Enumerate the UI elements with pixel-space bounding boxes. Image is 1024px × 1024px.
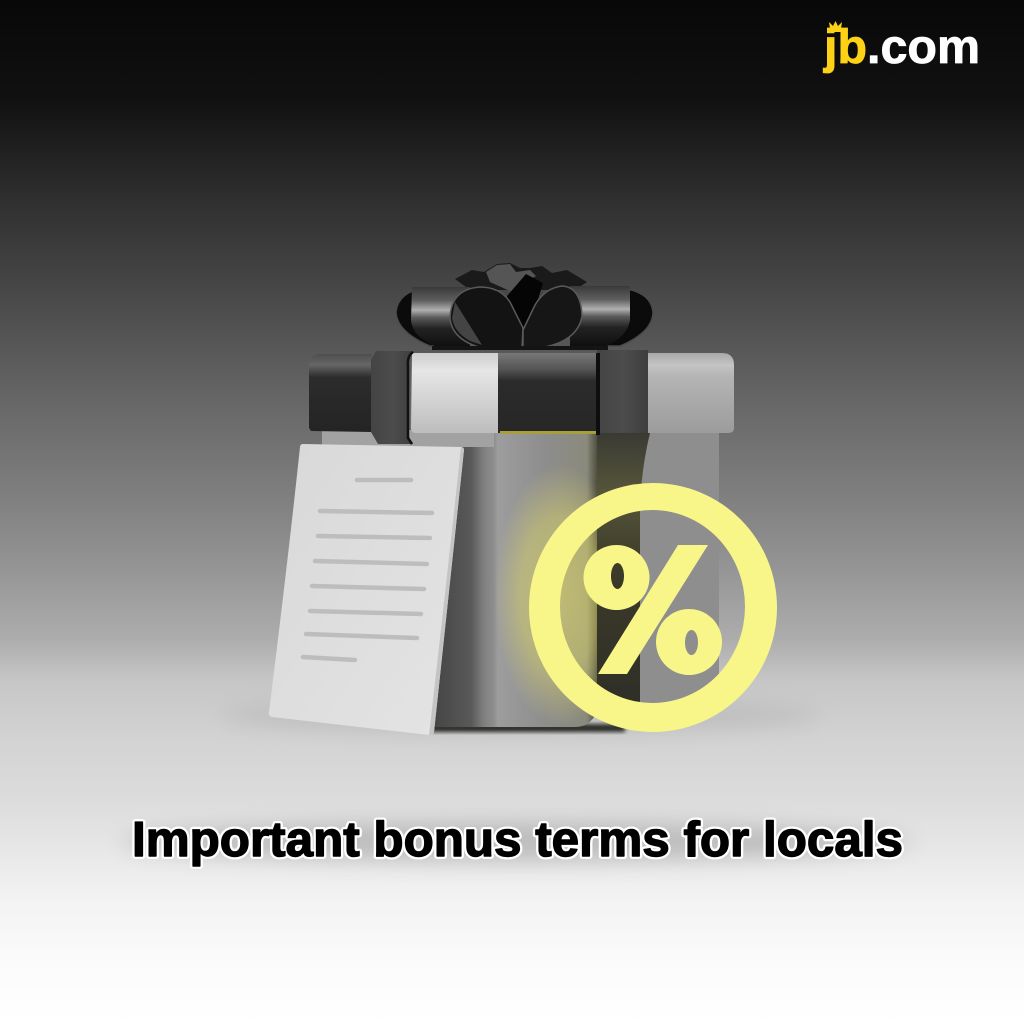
logo crown [829,21,842,32]
paper shadow on box [432,447,497,727]
gift box [309,263,734,732]
floor shadow [220,698,820,734]
box left side [322,430,497,727]
yellow glow on box [494,465,626,725]
vertical ribbon on box [597,433,650,704]
badge ring [529,483,777,732]
right bow loop [585,288,653,346]
ribbon bow [396,263,653,350]
left inner loop [450,287,523,348]
right lid ribbon [597,350,648,433]
right inner loop [523,286,582,348]
percent sign [584,545,722,675]
percent badge [529,483,777,732]
title shadow [122,822,912,862]
left lid ribbon [371,351,414,444]
sheet page [269,444,464,735]
title: Important bonus terms for locals [132,813,903,867]
box contact shadow [425,724,625,732]
box front face [494,433,597,727]
document sheet [269,444,464,735]
lid [309,350,734,444]
box right face [640,433,719,703]
bow crown [455,263,587,290]
logo [823,21,980,74]
title: Important bonus terms for locals [132,813,903,867]
left bow loop [396,288,455,346]
logo wordmark: jb.com [823,21,980,74]
sheet text lines [303,480,432,660]
